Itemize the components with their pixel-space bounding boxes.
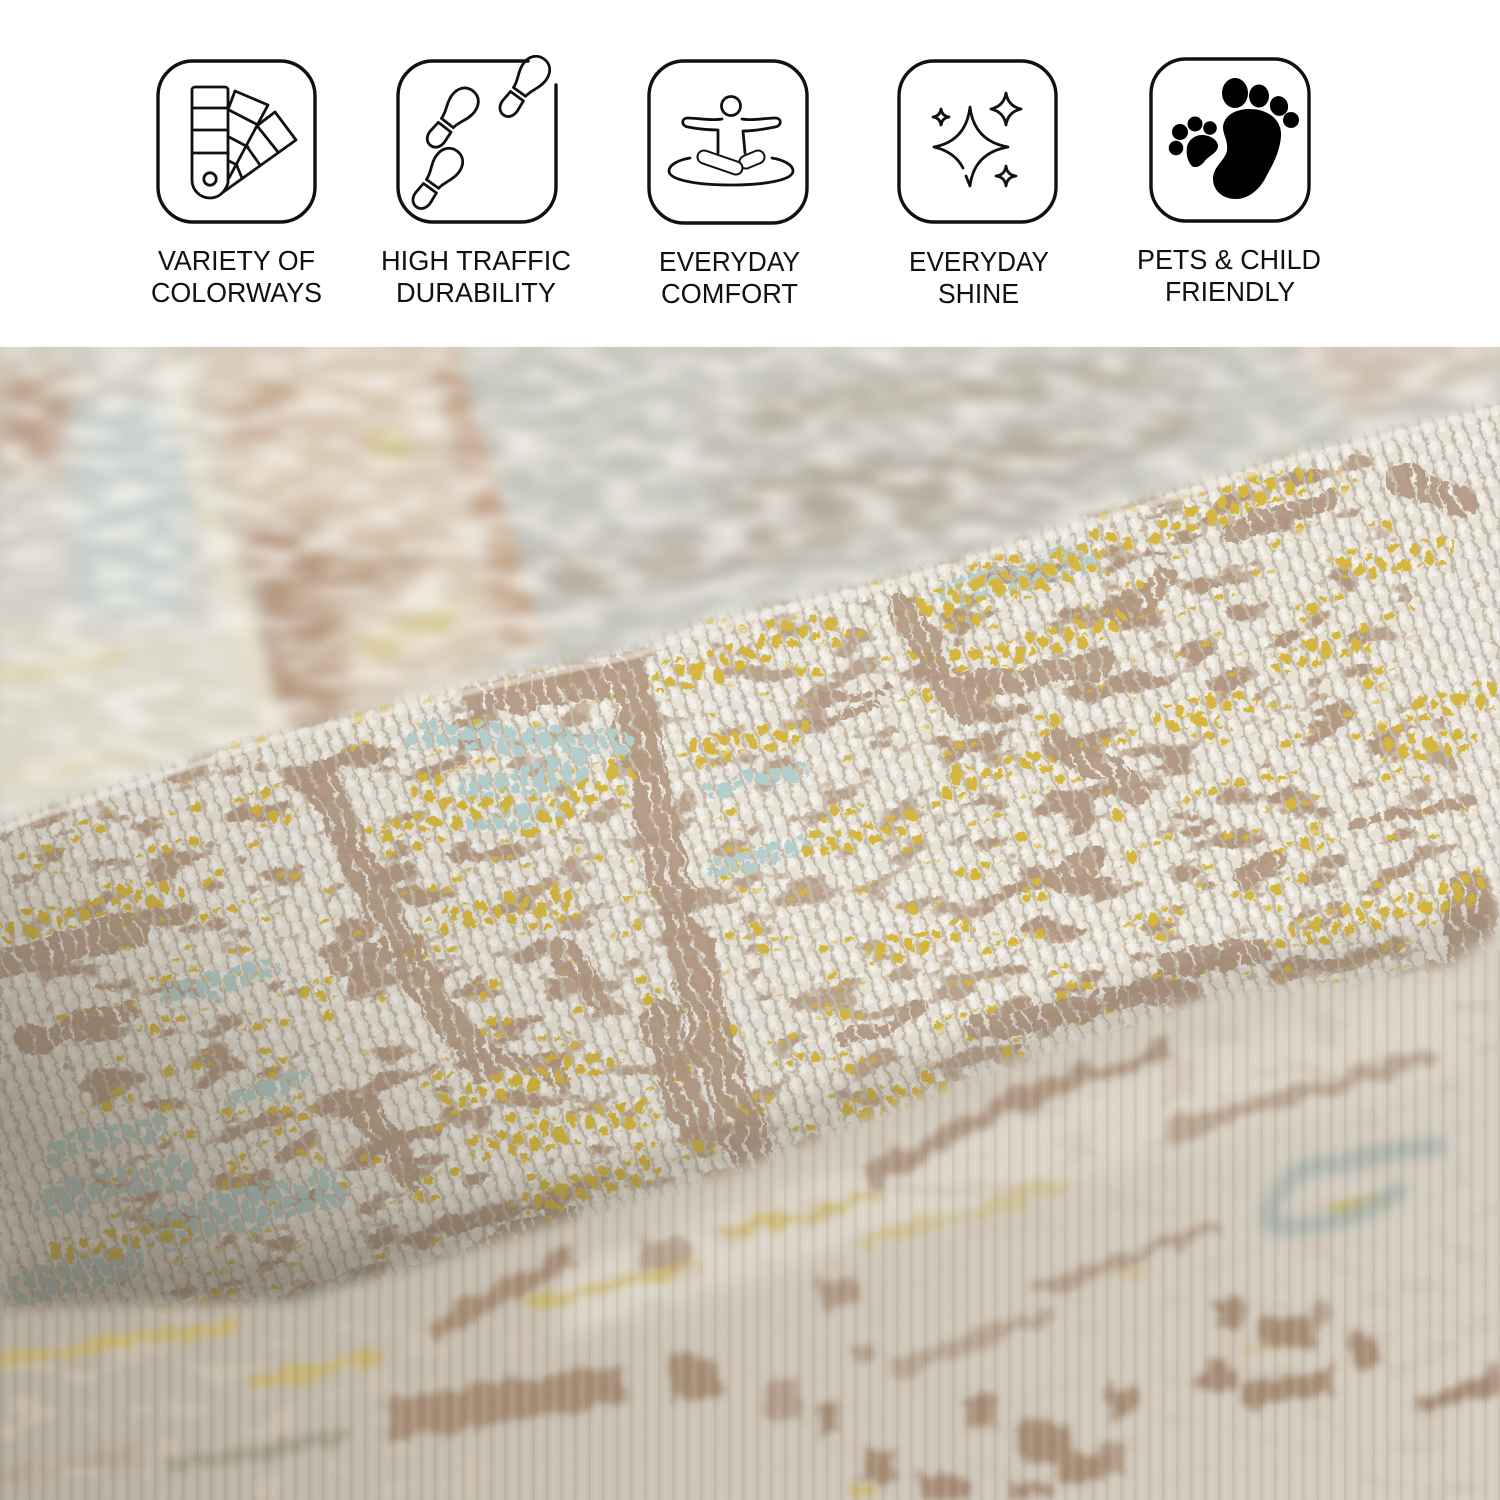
feature: everyday comfort: COMFORT [661,278,798,309]
feature: high traffic durability: DURABILITY [396,277,556,308]
rolled rug body [0,402,1500,1316]
mottled tan and yellow pile [0,444,1498,1312]
shadow towards the lower left [0,733,838,1317]
feature: pets and child friendly: FRIENDLY [1165,276,1295,307]
feature: variety of colorways [151,61,322,308]
icon frame [649,61,807,223]
pale blue stitches [20,560,1085,1320]
feature: variety of colorways: COLORWAYS [151,277,322,308]
blurred rug background [0,347,1500,950]
feature: high traffic durability [381,51,571,308]
flat rug below the fold [0,950,1500,1500]
icon: seated meditation figure [669,96,793,185]
icon frame [158,61,315,222]
feature: pets and child friendly [1137,59,1321,307]
feature: everyday shine: SHINE [938,278,1019,309]
icon: child foot and paw print [1169,78,1299,199]
brown pattern bands [0,480,1470,1290]
icon: sparkles [933,93,1021,186]
shadow along the fold [0,920,1500,1300]
label: EVERYDAY [659,246,800,277]
icon frame [1151,59,1309,221]
label: PETS & CHILD [1137,244,1321,275]
icon frame [899,61,1056,222]
icon frame [398,61,556,222]
feature: everyday shine [899,61,1056,309]
yellow stitches [10,480,1500,1255]
blue-grey medallion [1265,1145,1445,1227]
icon: footprints [405,51,555,215]
feature: everyday comfort [649,61,807,309]
photo: rolled rug close-up [0,345,1500,1500]
roll top edge highlight [0,409,1500,829]
label: HIGH TRAFFIC [381,245,571,276]
icon: colour swatch fan [192,87,296,198]
label: EVERYDAY [909,246,1049,277]
label: VARIETY OF [158,245,315,276]
